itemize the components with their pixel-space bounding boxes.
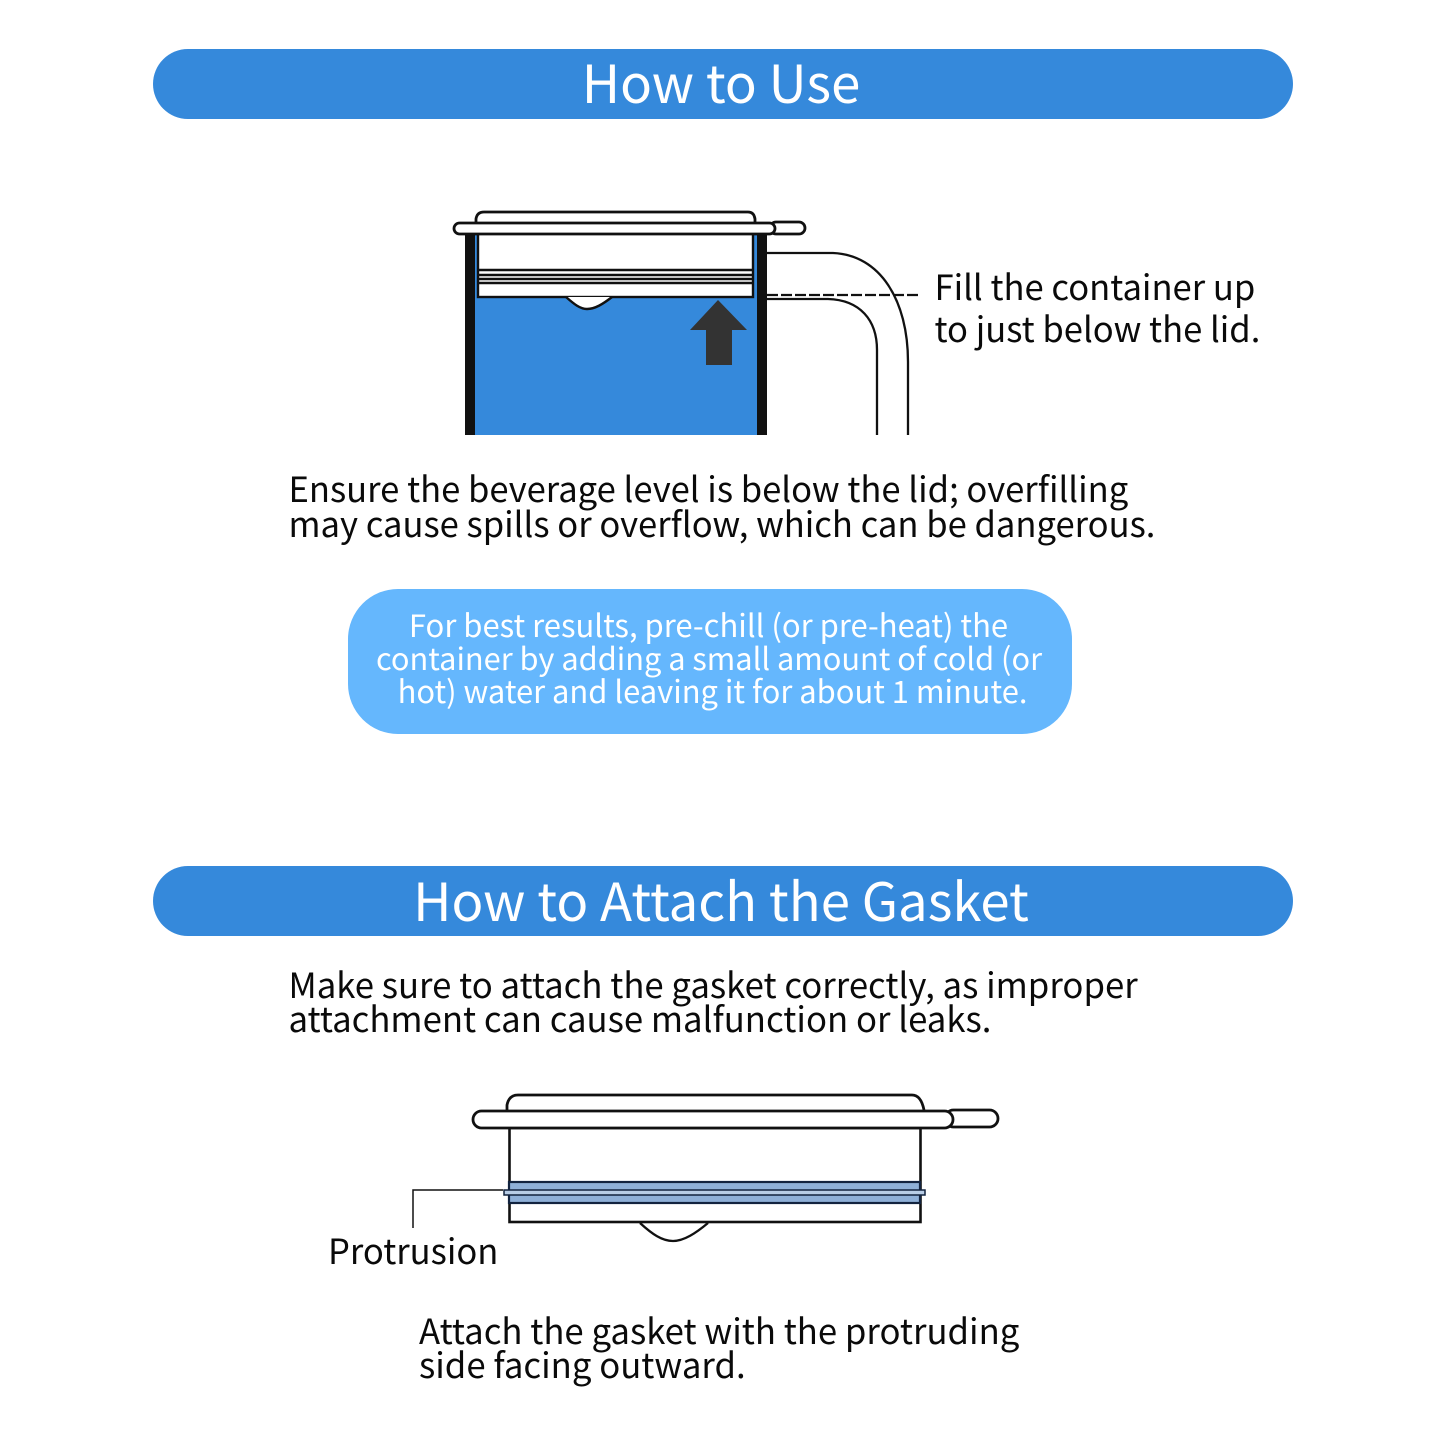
fill instruction callout [934, 260, 1260, 352]
gasket orientation text: Attach the gasket with the protruding [419, 1304, 1019, 1354]
warning text: Ensure the beverage level is below the lid; overfilling [288, 462, 1128, 512]
warning text [288, 462, 1155, 547]
fill instruction callout: to just below the lid. [934, 302, 1260, 352]
handle [767, 253, 908, 435]
gasket band [504, 1182, 925, 1203]
heading: How to Attach the Gasket [152, 866, 1292, 936]
lid insert [478, 233, 753, 309]
gasket orientation text: side facing outward. [419, 1338, 746, 1388]
tip panel: container by adding a small amount of cold (or [376, 634, 1042, 679]
protrusion leader line [413, 1190, 503, 1228]
up arrow [690, 300, 747, 365]
heading: How to Attach the Gasket: How to Attach the Gasket [413, 861, 1029, 937]
heading: How to Use: How to Use [582, 43, 860, 119]
fill-level dashed line [767, 294, 920, 296]
lid top and flange [454, 212, 805, 234]
protrusion label: Protrusion [328, 1224, 498, 1274]
fill instruction callout: Fill the container up [934, 260, 1255, 310]
warning text: may cause spills or overflow, which can be dangerous. [288, 497, 1155, 547]
tip panel: hot) water and leaving it for about 1 minute. [398, 667, 1027, 712]
gasket orientation text [419, 1304, 1019, 1388]
gasket intro text [288, 958, 1138, 1042]
gasket bump [640, 1223, 708, 1241]
tip panel: For best results, pre-chill (or pre-heat) the [409, 601, 1008, 646]
container walls [465, 233, 767, 435]
lid top and flange [473, 1095, 998, 1128]
gasket intro text: attachment can cause malfunction or leaks. [288, 992, 991, 1042]
lid body [510, 1128, 920, 1222]
tip panel [348, 589, 1072, 734]
gasket intro text: Make sure to attach the gasket correctly, as improper [288, 958, 1138, 1008]
water fill [473, 233, 759, 435]
heading: How to Use [152, 49, 1292, 119]
